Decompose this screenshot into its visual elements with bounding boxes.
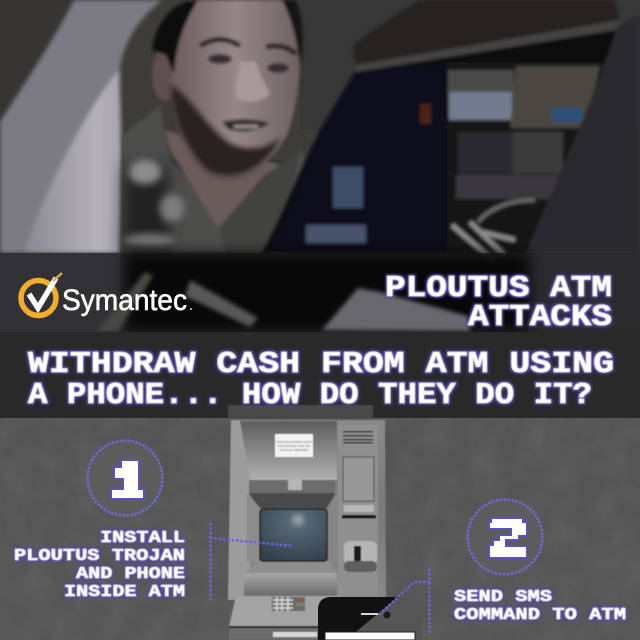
ATM screen: [260, 509, 327, 561]
ATM body: [228, 420, 386, 600]
ATM notice: VISUALLY IMPAIRED: [279, 448, 309, 452]
step 1 numeral: [112, 461, 143, 498]
step 2 text: SEND SMS: [454, 587, 552, 606]
wordmark: Symantec: [62, 284, 187, 317]
ATM vents: [343, 431, 373, 444]
phone camera: [384, 612, 390, 618]
ATM right column: [338, 425, 378, 596]
headline: A PHONE... HOW DO THEY DO IT?: [28, 378, 592, 413]
photo: open ATM cabinet: [262, 0, 640, 262]
step 1 text: INSTALL: [100, 528, 185, 547]
ATM card reader: [344, 541, 377, 572]
step 2 numeral: [490, 519, 526, 557]
phone screen: [325, 632, 415, 640]
ATM notice: THIS ATM OFFERS AUDIO: [276, 440, 313, 444]
photo: technician opening ATM: [0, 0, 640, 262]
ATM illustration: [228, 420, 386, 640]
band photo details: hand and equipment: [98, 253, 530, 332]
title: ATTACKS: [468, 300, 612, 335]
step 2 connector: [380, 570, 430, 636]
photo: head: [152, 0, 303, 176]
step 1 text: PLOUTUS TROJAN: [14, 546, 185, 565]
headline: [28, 347, 614, 413]
ATM keypad: [272, 597, 305, 611]
title band: [0, 253, 640, 332]
ATM shelf: [244, 562, 337, 573]
step 1 text: INSIDE ATM: [64, 582, 185, 601]
ATM screen housing: [249, 480, 335, 508]
phone speaker: [361, 613, 378, 615]
ATM notice: ASSISTANCE FOR THE: [278, 444, 310, 448]
photo: curved white panel: [0, 0, 162, 253]
step 1 connector: [210, 524, 293, 602]
ATM receipt slot: [342, 505, 376, 518]
headline band: [0, 332, 640, 418]
ATM hood: [240, 421, 337, 480]
title: PLOUTUS ATM: [385, 271, 612, 306]
phone: [318, 597, 422, 640]
ATM side display: [343, 457, 374, 501]
step 2 text: [454, 587, 626, 624]
step 1 text: AND PHONE: [76, 564, 185, 583]
wall texture: [0, 418, 640, 640]
ATM keypad ledge: [229, 596, 340, 626]
step 2 text: COMMAND TO ATM: [454, 605, 626, 624]
step 1 badge: [88, 440, 162, 516]
step 2 badge: [468, 500, 542, 574]
photo: shirt: [122, 105, 308, 253]
step 1 text: [14, 528, 185, 601]
icon: check mark badge: [21, 273, 62, 316]
Symantec logo: [21, 273, 192, 317]
ATM notice: [275, 434, 313, 457]
title: [385, 271, 612, 335]
headline: WITHDRAW CASH FROM ATM USING: [28, 347, 614, 382]
ATM top seen through band: [228, 405, 373, 418]
ATM lower panel: [229, 626, 319, 640]
